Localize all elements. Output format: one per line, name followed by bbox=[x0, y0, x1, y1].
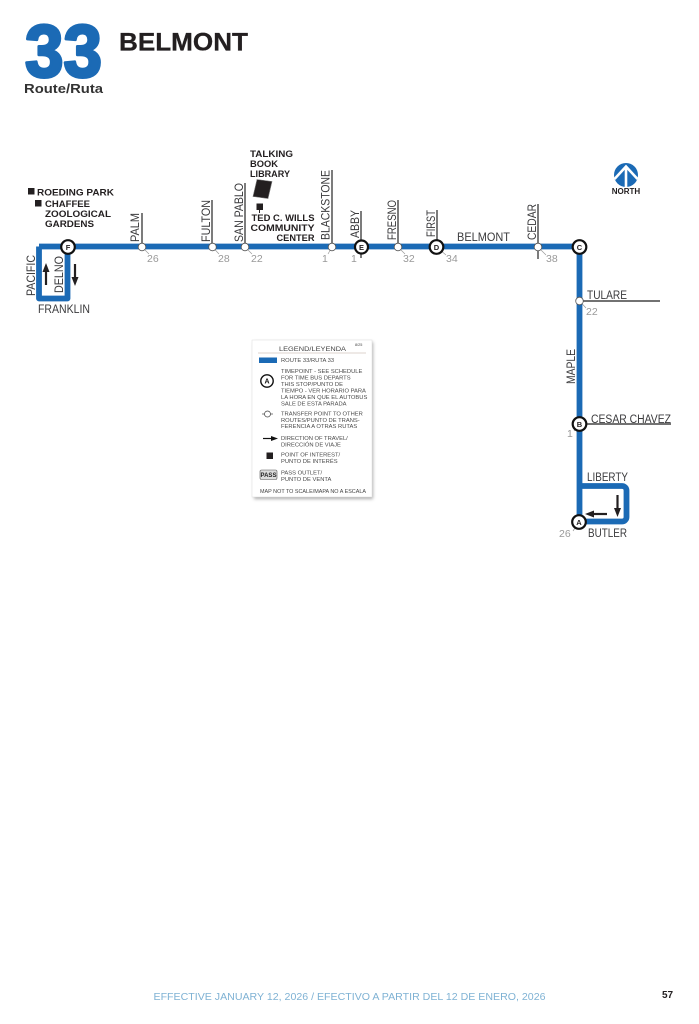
point of interest: Ted C. Wills Community Center bbox=[250, 204, 315, 244]
panel: legend: TIEMPO - VER HORARIO PARA bbox=[281, 388, 366, 394]
connecting route numbers: 32 bbox=[403, 253, 415, 265]
point of interest: Ted C. Wills Community Center: TED C. WILLS bbox=[252, 213, 314, 224]
panel: legend: A bbox=[264, 378, 270, 386]
point of interest: Talking Book Library: BOOK bbox=[250, 159, 278, 170]
street labels: vertical: BLACKSTONE bbox=[320, 170, 332, 240]
panel: legend: PUNTO DE INTERÉS bbox=[281, 458, 338, 465]
timepoint letters: C bbox=[577, 243, 583, 252]
connecting route numbers: 22 bbox=[586, 306, 598, 318]
connecting route numbers bbox=[147, 253, 598, 540]
street labels: vertical: ABBY bbox=[350, 210, 362, 238]
panel: legend: TRANSFER POINT TO OTHER bbox=[281, 412, 363, 418]
connecting route numbers: 38 bbox=[546, 253, 558, 265]
icon: north arrow bbox=[612, 163, 640, 196]
panel: legend: TIMEPOINT - SEE SCHEDULE bbox=[281, 369, 363, 375]
points of interest: Roeding Park and Chaffee Zoo bbox=[28, 188, 114, 230]
street labels: vertical: PALM bbox=[130, 213, 142, 242]
street labels: vertical bbox=[26, 170, 578, 384]
timepoint letters: F bbox=[66, 243, 71, 252]
street labels: vertical: CEDAR bbox=[527, 204, 539, 240]
point of interest: Talking Book Library bbox=[250, 149, 293, 198]
panel: legend: ROUTE 33/RUTA 33 bbox=[281, 358, 334, 364]
page number: 57 bbox=[662, 990, 674, 1001]
point of interest: Talking Book Library: TALKING bbox=[250, 149, 293, 160]
points of interest: Roeding Park and Chaffee Zoo: ROEDING PARK bbox=[37, 188, 114, 198]
route number: 33 bbox=[25, 10, 102, 92]
points of interest: Roeding Park and Chaffee Zoo: GARDENS bbox=[45, 219, 94, 230]
connecting route numbers: 1 bbox=[567, 428, 573, 440]
connecting route numbers: 28 bbox=[218, 253, 230, 265]
panel: legend bbox=[252, 340, 373, 499]
transfer stops bbox=[138, 243, 583, 305]
route label: Route/Ruta bbox=[24, 81, 104, 96]
street labels: vertical: FULTON bbox=[201, 200, 213, 242]
timepoint letters: A bbox=[576, 518, 582, 527]
timepoints bbox=[61, 240, 586, 529]
street labels: vertical: FRESNO bbox=[387, 200, 399, 240]
panel: legend: 8/25 bbox=[355, 343, 362, 347]
connecting route numbers: 22 bbox=[251, 253, 263, 265]
panel: legend: PASS bbox=[261, 473, 276, 479]
street labels: horizontal: BUTLER bbox=[588, 528, 627, 540]
connecting route numbers: 34 bbox=[446, 253, 458, 265]
point of interest: Ted C. Wills Community Center: COMMUNITY bbox=[250, 223, 315, 234]
street labels: horizontal: TULARE bbox=[587, 290, 627, 302]
panel: legend: MAP NOT TO SCALE/MAPA NO A ESCALA bbox=[260, 489, 367, 495]
panel: legend: POINT OF INTEREST/ bbox=[281, 452, 341, 458]
street labels: vertical: FIRST bbox=[426, 210, 438, 237]
title: BELMONT bbox=[119, 28, 248, 56]
panel: legend: FOR TIME BUS DEPARTS bbox=[281, 376, 351, 382]
street labels: horizontal: CESAR CHAVEZ bbox=[591, 414, 671, 426]
timepoint letters: B bbox=[577, 420, 583, 429]
panel: legend: PUNTO DE VENTA bbox=[281, 477, 331, 483]
panel: legend: THIS STOP/PUNTO DE bbox=[281, 382, 343, 388]
points of interest: Roeding Park and Chaffee Zoo: ZOOLOGICAL bbox=[45, 209, 111, 220]
point of interest: Talking Book Library: LIBRARY bbox=[250, 169, 291, 180]
panel: legend: DIRECTION OF TRAVEL/ bbox=[281, 436, 348, 442]
connecting route numbers: 1 bbox=[322, 253, 328, 265]
panel: legend: LEGEND/LEYENDA bbox=[279, 346, 346, 353]
number ticks bbox=[142, 247, 586, 531]
street labels: horizontal: FRANKLIN bbox=[38, 304, 90, 316]
panel: legend: DIRECCIÓN DE VIAJE bbox=[281, 442, 341, 448]
street labels: vertical: SAN PABLO bbox=[234, 183, 246, 242]
street labels: horizontal: LIBERTY bbox=[587, 472, 628, 484]
icon: north arrow: NORTH bbox=[612, 187, 640, 196]
timepoint letters bbox=[66, 243, 583, 527]
point of interest: Ted C. Wills Community Center: CENTER bbox=[276, 233, 315, 244]
street labels: vertical: DELNO bbox=[54, 256, 66, 293]
panel: legend: SALE DE ESTA PARADA bbox=[281, 402, 347, 408]
panel: legend: ROUTES/PUNTO DE TRANS- bbox=[281, 418, 360, 424]
connecting route numbers: 1 bbox=[351, 253, 357, 265]
points of interest: Roeding Park and Chaffee Zoo: CHAFFEE bbox=[45, 199, 90, 210]
route line bbox=[39, 246, 626, 522]
panel: legend: PASS OUTLET/ bbox=[281, 470, 323, 476]
cross streets bbox=[142, 170, 671, 424]
timepoint letters: D bbox=[434, 243, 440, 252]
street labels: horizontal: BELMONT bbox=[457, 232, 510, 244]
street labels: horizontal bbox=[38, 232, 671, 540]
panel: legend: LA HORA EN QUE EL AUTOBUS bbox=[281, 395, 367, 401]
panel: legend: FERENCIA A OTRAS RUTAS bbox=[281, 424, 357, 430]
icon: book bbox=[253, 180, 272, 198]
direction arrows bbox=[42, 263, 621, 518]
connecting route numbers: 26 bbox=[559, 528, 571, 540]
street labels: vertical: PACIFIC bbox=[26, 255, 38, 296]
street labels: vertical: MAPLE bbox=[566, 349, 578, 384]
footer: effective date: EFFECTIVE JANUARY 12, 2026 / EFECTIVO A PARTIR DEL 12 DE ENERO, 2026 bbox=[154, 991, 546, 1003]
timepoint letters: E bbox=[359, 243, 364, 252]
connecting route numbers: 26 bbox=[147, 253, 159, 265]
